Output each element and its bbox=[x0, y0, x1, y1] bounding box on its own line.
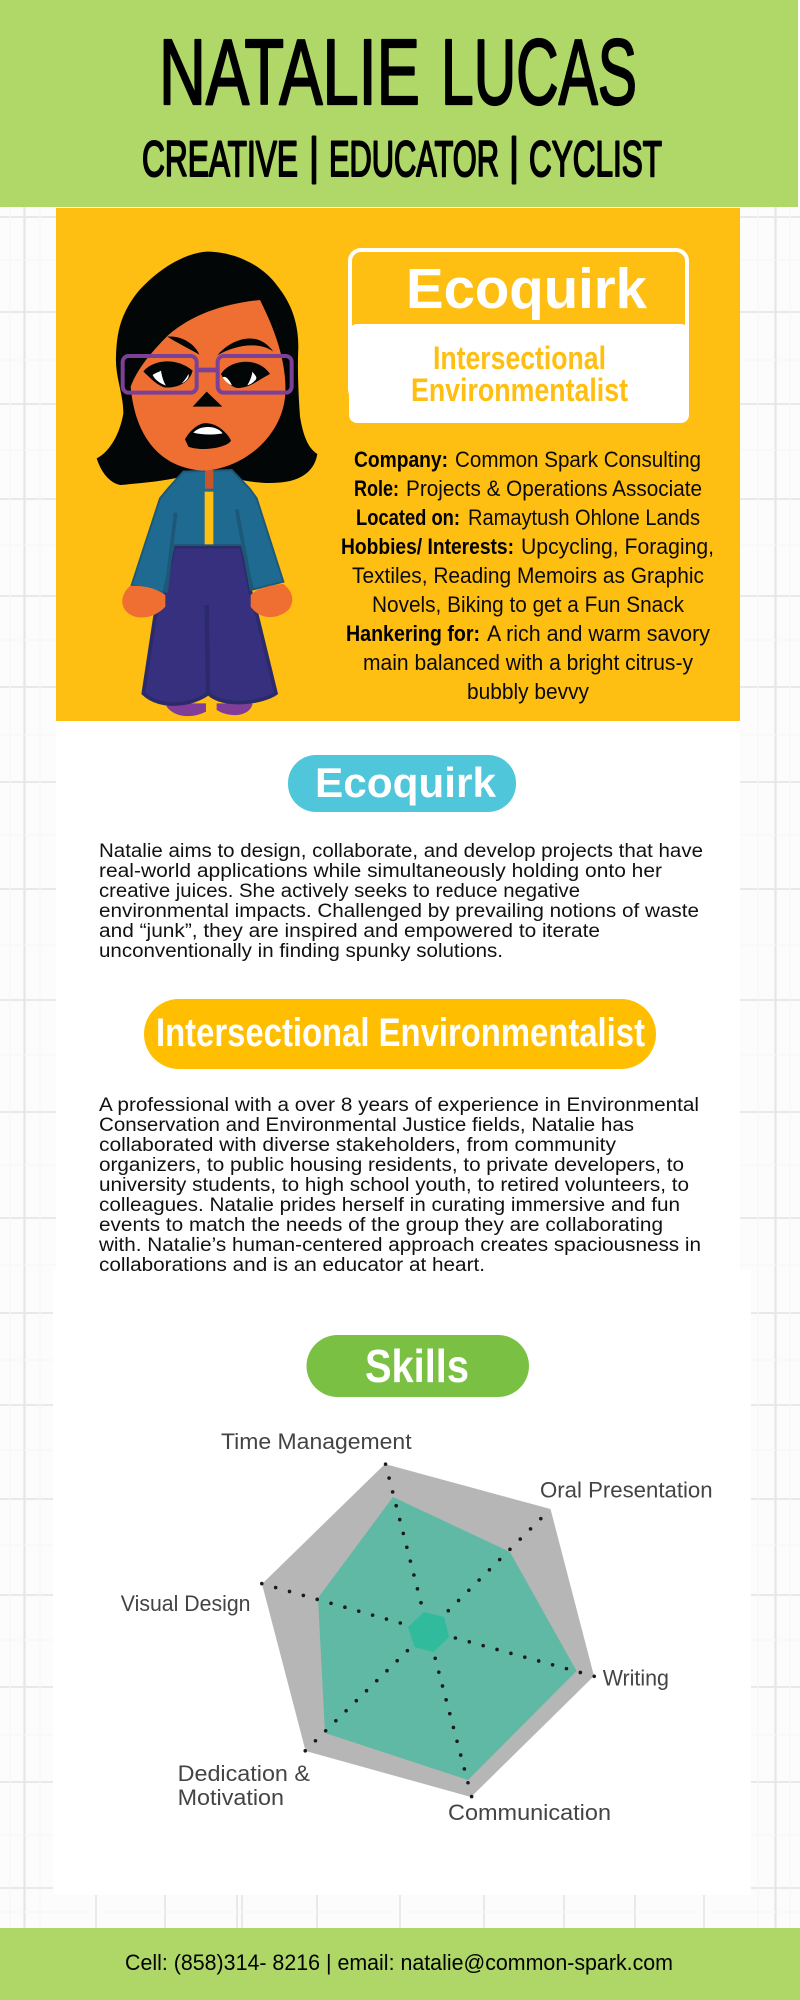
radar labels: Dedication & bbox=[178, 1761, 310, 1786]
card subheading bbox=[411, 340, 628, 408]
text block: Intersectional Environmentalist description bbox=[98, 1095, 701, 1276]
text block: Ecoquirk description: unconventionally in finding spunky solutions. bbox=[99, 941, 503, 962]
card subheading: Intersectional bbox=[433, 340, 606, 376]
text block: Intersectional Environmentalist description: Conservation and Environmental Justice fields, Natalie has bbox=[99, 1115, 634, 1136]
subtitle: roles: | bbox=[509, 128, 519, 184]
white content panel bbox=[53, 208, 751, 1895]
text block: Intersectional Environmentalist description: colleagues. Natalie prides herself in curating immersive and fun bbox=[99, 1195, 680, 1216]
icon: mouth bbox=[185, 423, 231, 449]
radar: dotted axes bbox=[262, 1462, 595, 1798]
heading pill: Ecoquirk bbox=[288, 755, 516, 812]
text block: Ecoquirk description: Natalie aims to design, collaborate, and develop projects that have bbox=[99, 841, 703, 862]
icon: glasses bbox=[123, 356, 292, 393]
contact details: Cell: (858)314- 8216 | email: natalie@common-spark.com bbox=[125, 1950, 673, 1975]
text block: profile details: Hobbies/ Interests: bbox=[341, 534, 514, 559]
text block: profile details: Upcycling, Foraging, bbox=[521, 534, 714, 559]
subtitle: roles: | bbox=[309, 128, 319, 184]
footer band bbox=[0, 1928, 800, 2000]
heading pill: Skills: Skills bbox=[365, 1340, 469, 1392]
heading pill: Skills bbox=[306, 1335, 529, 1397]
icon: character avatar bbox=[97, 252, 317, 716]
subtitle: roles bbox=[142, 128, 662, 187]
text block: Intersectional Environmentalist description: organizers, to public housing residents, to private developers, to bbox=[99, 1155, 684, 1176]
text block: Intersectional Environmentalist description: events to match the needs of the group they are collaborating bbox=[99, 1215, 663, 1236]
radar labels: Motivation bbox=[178, 1785, 284, 1810]
icon: face bbox=[131, 300, 285, 471]
radar labels bbox=[121, 1429, 713, 1825]
icon: eyes bbox=[143, 361, 270, 388]
text block: Intersectional Environmentalist description: collaborations and is an educator at heart. bbox=[99, 1255, 485, 1276]
subtitle: roles: CREATIVE bbox=[142, 131, 298, 187]
heading pill: Ecoquirk: Ecoquirk bbox=[315, 759, 497, 806]
icon: trousers bbox=[143, 547, 276, 704]
icon: hair bbox=[97, 252, 317, 485]
title: name: NATALIE bbox=[159, 20, 420, 124]
radar labels: Time Management bbox=[221, 1429, 412, 1454]
text block: profile details: main balanced with a bright citrus-y bbox=[363, 650, 694, 675]
radar: center bbox=[408, 1612, 449, 1652]
text block: profile details: Novels, Biking to get a Fun Snack bbox=[372, 592, 685, 617]
text block: profile details: Ramaytush Ohlone Lands bbox=[468, 505, 700, 530]
title: name: LUCAS bbox=[441, 20, 637, 124]
text block: profile details: Textiles, Reading Memoirs as Graphic bbox=[352, 563, 704, 588]
heading pill: Intersectional Environmentalist: Intersectional Environmentalist bbox=[156, 1011, 645, 1055]
card heading: Ecoquirk bbox=[406, 257, 647, 321]
radar labels: Communication bbox=[448, 1800, 611, 1825]
text block: Ecoquirk description bbox=[99, 841, 703, 962]
text block: profile details: bubbly bevvy bbox=[467, 679, 590, 704]
header band bbox=[0, 0, 798, 207]
text block: Intersectional Environmentalist description: A professional with a over 8 years of experience in Environmental bbox=[99, 1095, 699, 1116]
text block: profile details: Role: bbox=[354, 476, 399, 501]
text block: profile details: A rich and warm savory bbox=[487, 621, 711, 646]
text block: profile details: Company: bbox=[354, 447, 448, 472]
radar chart: skills bbox=[121, 1429, 713, 1825]
text block: profile details: Common Spark Consulting bbox=[455, 447, 701, 472]
text block: profile details bbox=[341, 447, 714, 704]
icon: hands bbox=[122, 586, 165, 618]
text block: profile details: Hankering for: bbox=[346, 621, 480, 646]
subtitle: roles: CYCLIST bbox=[529, 131, 662, 187]
card: archetype bbox=[349, 250, 689, 423]
text block: Intersectional Environmentalist description: with. Natalie’s human-centered approach creates spaciousness in bbox=[98, 1235, 701, 1256]
panel: profile bbox=[56, 208, 740, 721]
icon: shoes bbox=[167, 703, 253, 716]
radar: maximum range bbox=[262, 1464, 594, 1797]
card subheading: Environmentalist bbox=[411, 372, 628, 408]
radar labels: Oral Presentation bbox=[540, 1478, 713, 1503]
icon: nose bbox=[193, 392, 222, 407]
radar: skill levels bbox=[318, 1497, 577, 1780]
text block: Intersectional Environmentalist description: university students, to high school youth, to retired volunteers, to bbox=[99, 1175, 689, 1196]
text block: Ecoquirk description: and “junk”, they are inspired and empowered to iterate bbox=[99, 921, 600, 942]
text block: profile details: Projects & Operations Associate bbox=[406, 476, 702, 501]
radar labels: Visual Design bbox=[121, 1591, 250, 1616]
text block: Ecoquirk description: environmental impacts. Challenged by prevailing notions of waste bbox=[99, 901, 699, 922]
icon: eyebrows bbox=[167, 336, 273, 355]
heading pill: Intersectional Environmentalist bbox=[144, 999, 656, 1069]
radar labels: Writing bbox=[603, 1666, 669, 1691]
text block: Ecoquirk description: real-world applications while simultaneously holding onto her bbox=[99, 861, 663, 882]
subtitle: roles: EDUCATOR bbox=[329, 131, 499, 187]
text block: profile details: Located on: bbox=[356, 505, 460, 530]
text block: Intersectional Environmentalist description: collaborated with diverse stakeholders, from community bbox=[99, 1135, 617, 1156]
icon: jacket bbox=[132, 470, 283, 593]
text block: Ecoquirk description: creative juices. She actively seeks to reduce negative bbox=[99, 881, 580, 902]
